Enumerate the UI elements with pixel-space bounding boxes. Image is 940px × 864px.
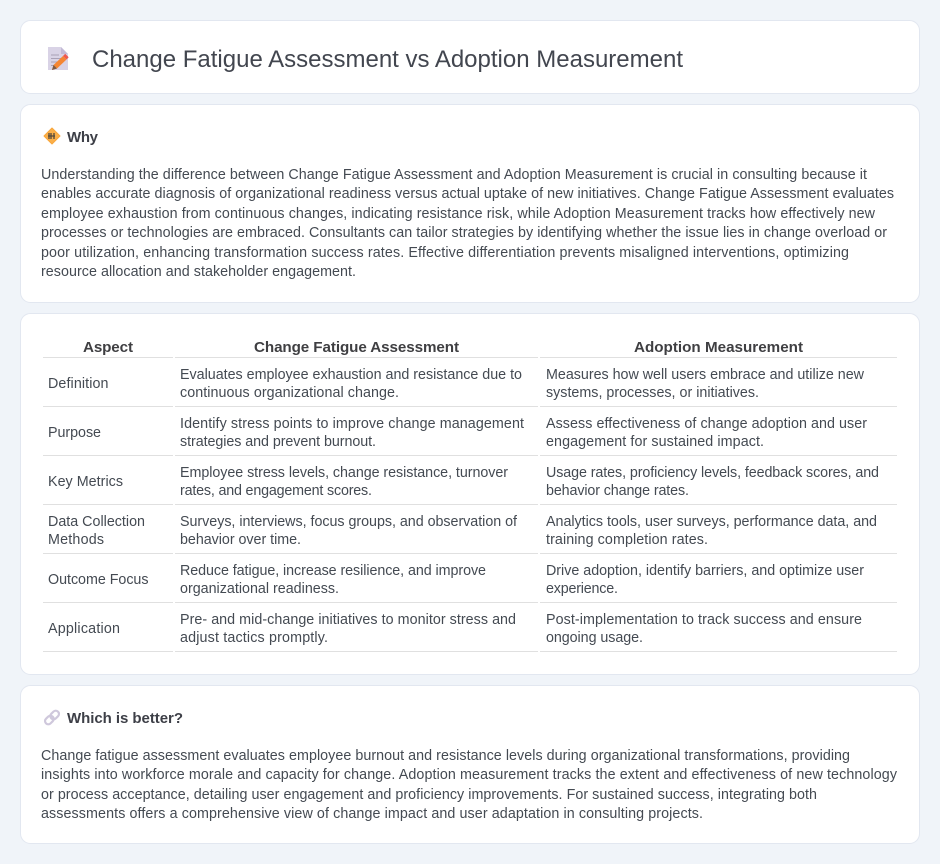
table row: data collection methods: Surveys, interviews, focus groups, and observation of — [180, 514, 517, 530]
table header — [83, 339, 803, 356]
table row: purpose: Assess effectiveness of change adoption and user — [546, 416, 867, 432]
table row: outcome focus — [48, 563, 864, 597]
table row: application: Pre- and mid-change initiatives to monitor stress and — [180, 612, 516, 628]
table row: purpose: strategies and prevent burnout. — [180, 434, 376, 450]
table row: definition: continuous organizational change. — [180, 385, 399, 401]
text block: why paragraph: employee exhaustion from continuous changes, indicating resistance risk, while Adoption Measurement tracks how effectively new — [41, 206, 876, 222]
table row: definition: systems, processes, or initiatives. — [546, 385, 759, 401]
table row: purpose — [48, 416, 867, 450]
text block: why paragraph — [41, 167, 894, 280]
table header: Change Fatigue Assessment — [254, 339, 459, 356]
table row: definition: Measures how well users embrace and utilize new — [546, 367, 865, 383]
panel: title header — [20, 20, 920, 94]
table header: Aspect — [83, 339, 133, 356]
table row: outcome focus: Outcome Focus — [48, 572, 148, 588]
table row: outcome focus: Drive adoption, identify barriers, and optimize user — [546, 563, 864, 579]
text block: which is better paragraph: insights into workforce morale and capacity for change. Adoption measurement tracks the extent and effectiveness of new technology — [41, 767, 898, 783]
table row: key metrics: rates, and engagement scores. — [180, 483, 372, 499]
table row: key metrics: behavior change rates. — [546, 483, 689, 499]
table row: application: Post-implementation to track success and ensure — [546, 612, 862, 628]
text block: which is better paragraph: assessments offers a comprehensive view of change impact and user adaptation in consulting projects. — [41, 806, 703, 822]
table row: purpose: Purpose — [48, 425, 101, 441]
heading: which is better: Which is better? — [67, 710, 183, 727]
table row: application — [48, 612, 862, 646]
table row: application: adjust tactics promptly. — [180, 630, 328, 646]
table row: purpose: Identify stress points to improve change management — [180, 416, 524, 432]
table row: key metrics — [48, 465, 879, 499]
table row: definition: Definition — [48, 376, 109, 392]
table row: purpose: engagement for sustained impact. — [546, 434, 764, 450]
panel: comparison table — [20, 314, 920, 674]
icon: link — [44, 709, 60, 726]
table row: data collection methods: behavior over time. — [180, 532, 301, 548]
table header: Adoption Measurement — [634, 339, 803, 356]
panel: which is better — [20, 686, 920, 844]
table row: data collection methods: Data Collection — [48, 514, 145, 530]
table row: application: ongoing usage. — [546, 630, 643, 646]
text block: why paragraph: processes or technologies are embraced. Consultants can tailor strategies by identifying whether the issue lies in change overload or — [41, 225, 887, 241]
table row: outcome focus: Reduce fatigue, increase resilience, and improve — [180, 563, 486, 579]
table row: key metrics: Usage rates, proficiency levels, feedback scores, and — [546, 465, 879, 481]
heading: why: Why — [67, 129, 99, 146]
panel: why — [20, 104, 920, 302]
table row: data collection methods — [48, 514, 877, 548]
table row: application: Application — [48, 621, 120, 637]
text block: which is better paragraph — [41, 748, 898, 822]
table row: data collection methods: training completion rates. — [546, 532, 708, 548]
text block: why paragraph: resource allocation and stakeholder engagement. — [41, 264, 356, 280]
table row: key metrics: Key Metrics — [48, 474, 123, 490]
text block: why paragraph: enables accurate diagnosis of organizational readiness versus actual uptake of new initiatives. Change Fatigue Assessment evaluates — [41, 186, 894, 202]
table row: key metrics: Employee stress levels, change resistance, turnover — [180, 465, 508, 481]
text block: which is better paragraph: or process acceptance, detailing user engagement and proficiency improvements. For sustained success, integrating both — [41, 787, 817, 803]
table row: definition — [48, 367, 865, 401]
text block: why paragraph: Understanding the difference between Change Fatigue Assessment and Adoption Measurement is crucial in consulting because it — [41, 167, 867, 183]
text block: why paragraph: poor utilization, enhancing transformation success rates. Effective differentiation prevents misaligned interventions, optimizing — [41, 245, 849, 261]
text block: which is better paragraph: Change fatigue assessment evaluates employee burnout and resistance levels during organizational transformations, providing — [41, 748, 850, 764]
table row: outcome focus: organizational readiness. — [180, 581, 339, 597]
table row: data collection methods: Analytics tools, user surveys, performance data, and — [546, 514, 877, 530]
icon: warning diamond — [44, 128, 60, 144]
table row: data collection methods: Methods — [48, 532, 104, 548]
icon: memo with pencil — [48, 47, 69, 70]
table row: definition: Evaluates employee exhaustion and resistance due to — [180, 367, 522, 383]
table row: outcome focus: experience. — [546, 581, 618, 597]
title: Change Fatigue Assessment vs Adoption Measurement — [92, 46, 683, 73]
